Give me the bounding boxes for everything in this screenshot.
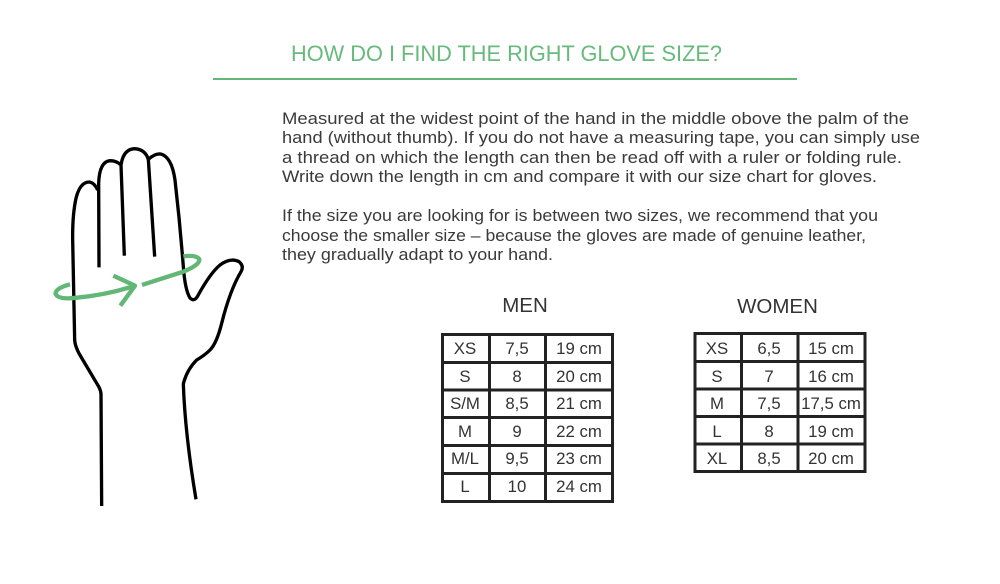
text block: sizing recommendation: choose the smaller size – because the gloves are made of genuine leather, [282, 226, 866, 245]
heading: men: MEN [502, 294, 548, 317]
table: men sizes: S [459, 367, 471, 386]
table: women sizes: M [710, 394, 724, 413]
table: men sizes: L [460, 477, 470, 496]
table: men sizes: XS [454, 339, 476, 358]
table: men sizes: 20 cm [556, 367, 602, 386]
table: men sizes: 10 [508, 477, 526, 496]
table: men sizes: 7,5 [505, 339, 529, 358]
table: men sizes: S/M [450, 394, 480, 413]
text block: sizing recommendation: If the size you are looking for is between two sizes, we recommend that you [282, 206, 878, 225]
table: men sizes [442, 334, 612, 502]
table: men sizes: 8,5 [505, 394, 529, 413]
title: HOW DO I FIND THE RIGHT GLOVE SIZE? [291, 41, 722, 66]
green measuring arrow [56, 256, 199, 306]
table: men sizes: 23 cm [556, 449, 602, 468]
text block: measuring instructions: a thread on which the length can then be read off with a ruler or folding rule. [282, 148, 902, 167]
table: women sizes: 8,5 [757, 449, 781, 468]
text block: measuring instructions: hand (without thumb). If you do not have a measuring tape, you can simply use [282, 128, 920, 147]
heading: women: WOMEN [737, 295, 818, 318]
table: women sizes: XS [706, 339, 728, 358]
text block: measuring instructions: Measured at the widest point of the hand in the middle obove the palm of the [282, 109, 909, 128]
text block: sizing recommendation: they gradually adapt to your hand. [282, 245, 553, 264]
text block: measuring instructions: Write down the length in cm and compare it with our size chart for gloves. [282, 167, 877, 186]
table: women sizes: 16 cm [808, 367, 854, 386]
table: women sizes: 7,5 [757, 394, 781, 413]
table: women sizes: 7 [764, 367, 774, 386]
table: women sizes: XL [707, 449, 727, 468]
table: women sizes [695, 334, 865, 472]
table: men sizes: 9 [512, 422, 522, 441]
table: men sizes: 22 cm [556, 422, 602, 441]
icon: hand with measuring tape [56, 149, 242, 506]
table: women sizes: 6,5 [757, 339, 781, 358]
text block: sizing recommendation [282, 206, 878, 264]
table: women sizes: 17,5 cm [801, 394, 861, 413]
table: men sizes: 8 [512, 367, 522, 386]
men table grid [442, 334, 612, 502]
text block: measuring instructions [282, 109, 920, 186]
table: women sizes: S [711, 367, 723, 386]
table: men sizes: M [458, 422, 472, 441]
table: women sizes: 19 cm [808, 422, 854, 441]
table: men sizes: 19 cm [556, 339, 602, 358]
table: women sizes: 8 [764, 422, 774, 441]
hand outline [73, 149, 242, 506]
women table grid [695, 334, 865, 472]
table: men sizes: 24 cm [556, 477, 602, 496]
table: women sizes: L [712, 422, 722, 441]
table: women sizes: 20 cm [808, 449, 854, 468]
table: men sizes: M/L [451, 449, 479, 468]
table: women sizes: 15 cm [808, 339, 854, 358]
table: men sizes: 9,5 [505, 449, 529, 468]
table: men sizes: 21 cm [556, 394, 602, 413]
